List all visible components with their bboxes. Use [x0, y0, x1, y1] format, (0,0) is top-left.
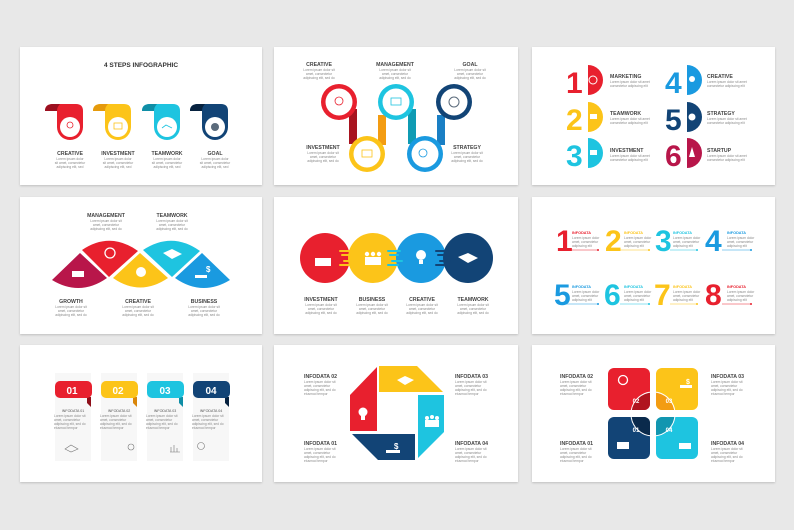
- title: 4 STEPS INFOGRAPHIC: [104, 62, 178, 69]
- labels: amet, consectetur: [125, 309, 152, 313]
- labels: amet, consectetur: [191, 309, 218, 313]
- step: creative: adipiscing elit, sed: [57, 165, 84, 169]
- row 1 items: INFODATA: [624, 231, 643, 235]
- circle: investment: [300, 233, 350, 283]
- tab 01: eiusmod tempor: [54, 426, 79, 430]
- item 3: Lorem ipsum dolor sit amet: [610, 154, 650, 158]
- labels: amet, consectetur: [304, 384, 331, 388]
- labels: eiusmod tempor: [455, 459, 480, 463]
- labels: INFODATA 03: [711, 374, 744, 380]
- item 2: 2: [566, 104, 583, 137]
- row 2 items: Lorem ipsum dolor: [727, 290, 755, 294]
- row 1 items: amet, consectetur: [572, 240, 599, 244]
- row 2 items: amet, consectetur: [727, 294, 754, 298]
- step: investment: sit amet, consectetur: [103, 161, 134, 165]
- tab 03: 03: [159, 386, 171, 397]
- labels: amet, consectetur: [306, 72, 333, 76]
- labels: eiusmod tempor: [455, 392, 480, 396]
- step: teamwork: adipiscing elit, sed: [154, 165, 181, 169]
- labels: amet, consectetur: [455, 384, 482, 388]
- labels: eiusmod tempor: [560, 392, 585, 396]
- step: investment: Lorem ipsum dolor: [104, 157, 133, 161]
- quadrant: 01 navy: [608, 417, 650, 459]
- row 1 items: [556, 225, 755, 258]
- labels: CREATIVE: [409, 297, 435, 303]
- item 3: [566, 138, 650, 173]
- tab 03: INFODATA 03: [154, 409, 176, 413]
- labels: INFODATA 04: [711, 441, 744, 447]
- quadrant: 02 red: 02: [633, 399, 640, 405]
- tab 02: eiusmod tempor: [100, 426, 125, 430]
- row 1 items: amet, consectetur: [673, 240, 700, 244]
- labels: eiusmod tempor: [560, 459, 585, 463]
- labels: INFODATA 02: [304, 374, 337, 380]
- labels: [304, 374, 488, 463]
- labels: amet, consectetur: [58, 309, 85, 313]
- step: teamwork: [142, 104, 183, 169]
- row 2 items: Lorem ipsum dolor: [673, 290, 701, 294]
- tab 04: [192, 381, 230, 450]
- labels: adipiscing elit, sed do: [455, 455, 487, 459]
- tab 02: 02: [112, 386, 124, 397]
- labels: amet, consectetur: [454, 155, 481, 159]
- tab 02: Lorem ipsum dolor sit: [100, 414, 132, 418]
- labels: Lorem ipsum dolor sit: [303, 68, 335, 72]
- labels: adipiscing elit, sed do: [560, 455, 592, 459]
- row 2 items: Lorem ipsum dolor: [572, 290, 600, 294]
- labels: Lorem ipsum dolor sit: [455, 380, 487, 384]
- row 1 items: adipiscing elit: [673, 244, 693, 248]
- row 2 items: INFODATA: [624, 285, 643, 289]
- item 2: TEAMWORK: [610, 111, 641, 117]
- labels: Lorem ipsum dolor sit: [379, 68, 411, 72]
- circle: strategy: [407, 136, 443, 172]
- tab 01: [54, 381, 92, 452]
- circle: investment: [349, 136, 385, 172]
- labels: Lorem ipsum dolor sit: [304, 447, 336, 451]
- row 1 items: Lorem ipsum dolor: [727, 236, 755, 240]
- step: teamwork: sit amet, consectetur: [152, 161, 183, 165]
- labels: Lorem ipsum dolor sit: [188, 305, 220, 309]
- labels: adipiscing elit, sed do: [156, 227, 188, 231]
- quadrant: 03 yellow: $: [686, 379, 690, 386]
- labels: MANAGEMENT: [87, 213, 126, 219]
- labels: [55, 213, 220, 317]
- labels: adipiscing elit, sed do: [55, 313, 87, 317]
- labels: BUSINESS: [191, 299, 218, 305]
- labels: BUSINESS: [359, 297, 386, 303]
- row 2 items: [554, 279, 755, 312]
- labels: Lorem ipsum dolor sit: [90, 219, 122, 223]
- segment: business: [175, 253, 230, 288]
- step: investment: [93, 104, 136, 169]
- segment: navy: $: [394, 442, 399, 451]
- slide: numbered list 1-6: [532, 47, 775, 185]
- segment: red: [350, 367, 377, 431]
- labels: Lorem ipsum dolor sit: [406, 303, 438, 307]
- labels: Lorem ipsum dolor sit: [711, 380, 743, 384]
- row 2 items: amet, consectetur: [624, 294, 651, 298]
- item 4: 4: [665, 67, 682, 100]
- row 1 items: 3: [655, 225, 672, 258]
- labels: adipiscing elit, sed do: [307, 159, 339, 163]
- slide: quadrant circle: [532, 345, 775, 482]
- slide: octagon cycle: [274, 345, 518, 482]
- segment: teamwork: [143, 241, 200, 277]
- labels: adipiscing elit, sed do: [305, 311, 337, 315]
- labels: amet, consectetur: [93, 223, 120, 227]
- connectors: [349, 109, 445, 145]
- circle: goal: [436, 84, 472, 120]
- labels: Lorem ipsum dolor sit: [457, 303, 489, 307]
- item 5: 5: [665, 104, 682, 137]
- labels: adipiscing elit, sed do: [560, 388, 592, 392]
- row 2 items: 5: [554, 279, 571, 312]
- tab 04: eiusmod tempor: [192, 426, 217, 430]
- labels: adipiscing elit, sed do: [457, 311, 489, 315]
- labels: amet, consectetur: [560, 451, 587, 455]
- row 1 items: adipiscing elit: [624, 244, 644, 248]
- circle: teamwork: [436, 233, 493, 283]
- slide: circle chain: [274, 47, 518, 185]
- step: creative: Lorem ipsum dolor: [56, 157, 85, 161]
- labels: eiusmod tempor: [711, 392, 736, 396]
- labels: TEAMWORK: [457, 297, 489, 303]
- labels: Lorem ipsum dolor sit: [454, 68, 486, 72]
- labels: INVESTMENT: [304, 297, 339, 303]
- item 1: MARKETING: [610, 74, 641, 80]
- row 1 items: amet, consectetur: [624, 240, 651, 244]
- item 6: STARTUP: [707, 148, 732, 154]
- item 4: Lorem ipsum dolor sit amet: [707, 80, 747, 84]
- item 2: Lorem ipsum dolor sit amet: [610, 117, 650, 121]
- labels: amet, consectetur: [711, 384, 738, 388]
- labels: adipiscing elit, sed do: [379, 76, 411, 80]
- labels: Lorem ipsum dolor sit: [307, 151, 339, 155]
- row 2 items: adipiscing elit: [624, 298, 644, 302]
- labels: amet, consectetur: [304, 451, 331, 455]
- step: creative: sit amet, consectetur: [55, 161, 86, 165]
- step: goal: GOAL: [208, 151, 223, 157]
- tab 04: INFODATA 04: [200, 409, 222, 413]
- item 5: STRATEGY: [707, 111, 735, 117]
- item 6: 6: [665, 140, 682, 173]
- labels: adipiscing elit, sed do: [304, 388, 336, 392]
- labels: adipiscing elit, sed do: [406, 311, 438, 315]
- item 3: INVESTMENT: [610, 148, 644, 154]
- tab 01: 01: [66, 386, 78, 397]
- step: goal: adipiscing elit, sed: [202, 165, 229, 169]
- item 5: [665, 102, 747, 137]
- labels: Lorem ipsum dolor sit: [451, 151, 483, 155]
- quadrant: 04 cyan: [656, 417, 698, 459]
- item 2: consectetur adipiscing elit: [610, 121, 648, 125]
- labels: INVESTMENT: [306, 145, 341, 151]
- row 1 items: Lorem ipsum dolor: [673, 236, 701, 240]
- item 3: 3: [566, 140, 583, 173]
- labels: adipiscing elit, sed do: [90, 227, 122, 231]
- slide: numbered tabs: [20, 345, 262, 482]
- labels: Lorem ipsum dolor sit: [156, 219, 188, 223]
- slide: overlapping circles: [274, 197, 518, 334]
- item 3: consectetur adipiscing elit: [610, 158, 648, 162]
- labels: [304, 297, 489, 315]
- row 2 items: adipiscing elit: [727, 298, 747, 302]
- item 6: Lorem ipsum dolor sit amet: [707, 154, 747, 158]
- row 1 items: 2: [605, 225, 622, 258]
- segment: creative: [113, 253, 168, 288]
- item 4: consectetur adipiscing elit: [707, 84, 745, 88]
- row 1 items: Lorem ipsum dolor: [624, 236, 652, 240]
- step: teamwork: Lorem ipsum dolor: [153, 157, 182, 161]
- row 1 items: adipiscing elit: [727, 244, 747, 248]
- step: investment: INVESTMENT: [101, 151, 136, 157]
- labels: amet, consectetur: [159, 223, 186, 227]
- labels: Lorem ipsum dolor sit: [304, 380, 336, 384]
- labels: Lorem ipsum dolor sit: [305, 303, 337, 307]
- labels: TEAMWORK: [156, 213, 188, 219]
- labels: INFODATA 01: [304, 441, 337, 447]
- labels: adipiscing elit, sed do: [455, 388, 487, 392]
- labels: amet, consectetur: [310, 155, 337, 159]
- labels: eiusmod tempor: [304, 459, 329, 463]
- item 4: CREATIVE: [707, 74, 733, 80]
- quadrant: 03 yellow: [656, 368, 698, 410]
- row 2 items: adipiscing elit: [673, 298, 693, 302]
- labels: amet, consectetur: [560, 384, 587, 388]
- tab 01: Lorem ipsum dolor sit: [54, 414, 86, 418]
- labels: amet, consectetur: [455, 451, 482, 455]
- row 1 items: adipiscing elit: [572, 244, 592, 248]
- quadrant: 02 red: [608, 368, 650, 410]
- row 2 items: 8: [705, 279, 722, 312]
- labels: Lorem ipsum dolor sit: [560, 447, 592, 451]
- step: creative: CREATIVE: [57, 151, 83, 157]
- step: goal: Lorem ipsum dolor: [201, 157, 230, 161]
- labels: Lorem ipsum dolor sit: [560, 380, 592, 384]
- labels: adipiscing elit, sed do: [356, 311, 388, 315]
- row 2 items: Lorem ipsum dolor: [624, 290, 652, 294]
- labels: CREATIVE: [306, 62, 332, 68]
- tab 04: 04: [205, 386, 217, 397]
- item 6: [665, 138, 747, 173]
- row 1 items: Lorem ipsum dolor: [572, 236, 600, 240]
- row 1 items: 1: [556, 225, 573, 258]
- step: investment: adipiscing elit, sed: [105, 165, 132, 169]
- step: goal: sit amet, consectetur: [200, 161, 231, 165]
- row 2 items: INFODATA: [727, 285, 746, 289]
- circle: creative: [321, 84, 357, 120]
- labels: STRATEGY: [453, 145, 481, 151]
- labels: Lorem ipsum dolor sit: [455, 447, 487, 451]
- labels: adipiscing elit, sed do: [451, 159, 483, 163]
- tab 03: amet, consectetur: [146, 418, 173, 422]
- circle: business: [340, 233, 398, 283]
- tab 01: amet, consectetur: [54, 418, 81, 422]
- labels: amet, consectetur: [457, 72, 484, 76]
- step: creative: [45, 104, 86, 169]
- labels: [303, 62, 486, 163]
- slide: wave segments: [20, 197, 262, 334]
- tab 03: eiusmod tempor: [146, 426, 171, 430]
- labels: INFODATA 01: [560, 441, 593, 447]
- labels: [560, 374, 744, 463]
- row 1 items: INFODATA: [572, 231, 591, 235]
- tab 01: adipiscing elit, sed do: [54, 422, 86, 426]
- tab 03: adipiscing elit, sed do: [146, 422, 178, 426]
- item 1: consectetur adipiscing elit: [610, 84, 648, 88]
- item 2: [566, 102, 650, 137]
- labels: MANAGEMENT: [376, 62, 415, 68]
- tab 02: amet, consectetur: [100, 418, 127, 422]
- tab 03: [146, 381, 184, 452]
- circle: creative: [388, 233, 446, 283]
- labels: INFODATA 03: [455, 374, 488, 380]
- row 2 items: 6: [604, 279, 621, 312]
- labels: amet, consectetur: [308, 307, 335, 311]
- labels: adipiscing elit, sed do: [304, 455, 336, 459]
- row 1 items: INFODATA: [727, 231, 746, 235]
- row 2 items: amet, consectetur: [572, 294, 599, 298]
- labels: amet, consectetur: [460, 307, 487, 311]
- row 2 items: INFODATA: [673, 285, 692, 289]
- item 1: Lorem ipsum dolor sit amet: [610, 80, 650, 84]
- segment: business: $: [206, 265, 211, 274]
- labels: amet, consectetur: [359, 307, 386, 311]
- item 5: consectetur adipiscing elit: [707, 121, 745, 125]
- tab 02: adipiscing elit, sed do: [100, 422, 132, 426]
- row 1 items: 4: [705, 225, 722, 258]
- labels: adipiscing elit, sed do: [303, 76, 335, 80]
- quadrant: 01 navy: 01: [633, 428, 640, 434]
- labels: amet, consectetur: [382, 72, 409, 76]
- segment: yellow: [379, 366, 443, 392]
- labels: amet, consectetur: [711, 451, 738, 455]
- item 6: consectetur adipiscing elit: [707, 158, 745, 162]
- labels: adipiscing elit, sed do: [454, 76, 486, 80]
- labels: eiusmod tempor: [304, 392, 329, 396]
- slide: numbers 1-8: [532, 197, 775, 334]
- step: goal: [190, 104, 231, 169]
- segment: navy: [352, 434, 415, 460]
- labels: adipiscing elit, sed do: [711, 388, 743, 392]
- labels: adipiscing elit, sed do: [188, 313, 220, 317]
- row 1 items: amet, consectetur: [727, 240, 754, 244]
- tab 02: [100, 381, 138, 450]
- row 1 items: INFODATA: [673, 231, 692, 235]
- tab 01: INFODATA 01: [62, 409, 84, 413]
- item 4: [665, 65, 747, 100]
- segment: cyan: [418, 395, 444, 458]
- labels: Lorem ipsum dolor sit: [711, 447, 743, 451]
- labels: Lorem ipsum dolor sit: [122, 305, 154, 309]
- labels: INFODATA 02: [560, 374, 593, 380]
- tab 04: amet, consectetur: [192, 418, 219, 422]
- row 2 items: adipiscing elit: [572, 298, 592, 302]
- card panels: [55, 373, 229, 461]
- tab 04: Lorem ipsum dolor sit: [192, 414, 224, 418]
- labels: adipiscing elit, sed do: [711, 455, 743, 459]
- item 5: Lorem ipsum dolor sit amet: [707, 117, 747, 121]
- step: teamwork: TEAMWORK: [151, 151, 183, 157]
- labels: INFODATA 04: [455, 441, 488, 447]
- segment: management: [82, 241, 138, 277]
- quadrant: 03 yellow: 03: [666, 399, 673, 405]
- item 1: 1: [566, 67, 583, 100]
- item 1: [566, 65, 650, 100]
- tab 02: INFODATA 02: [108, 409, 130, 413]
- tab 04: adipiscing elit, sed do: [192, 422, 224, 426]
- labels: GOAL: [462, 62, 478, 68]
- row 2 items: INFODATA: [572, 285, 591, 289]
- labels: amet, consectetur: [409, 307, 436, 311]
- slide: 4 steps infographic: [20, 47, 262, 185]
- row 2 items: 7: [654, 279, 671, 312]
- tab 03: Lorem ipsum dolor sit: [146, 414, 178, 418]
- labels: eiusmod tempor: [711, 459, 736, 463]
- segment: growth: [52, 253, 107, 288]
- labels: Lorem ipsum dolor sit: [356, 303, 388, 307]
- row 2 items: amet, consectetur: [673, 294, 700, 298]
- labels: adipiscing elit, sed do: [122, 313, 154, 317]
- labels: GROWTH: [59, 299, 83, 305]
- circle: management: [378, 84, 414, 120]
- quadrant: 04 cyan: 04: [666, 428, 673, 434]
- labels: CREATIVE: [125, 299, 151, 305]
- labels: Lorem ipsum dolor sit: [55, 305, 87, 309]
